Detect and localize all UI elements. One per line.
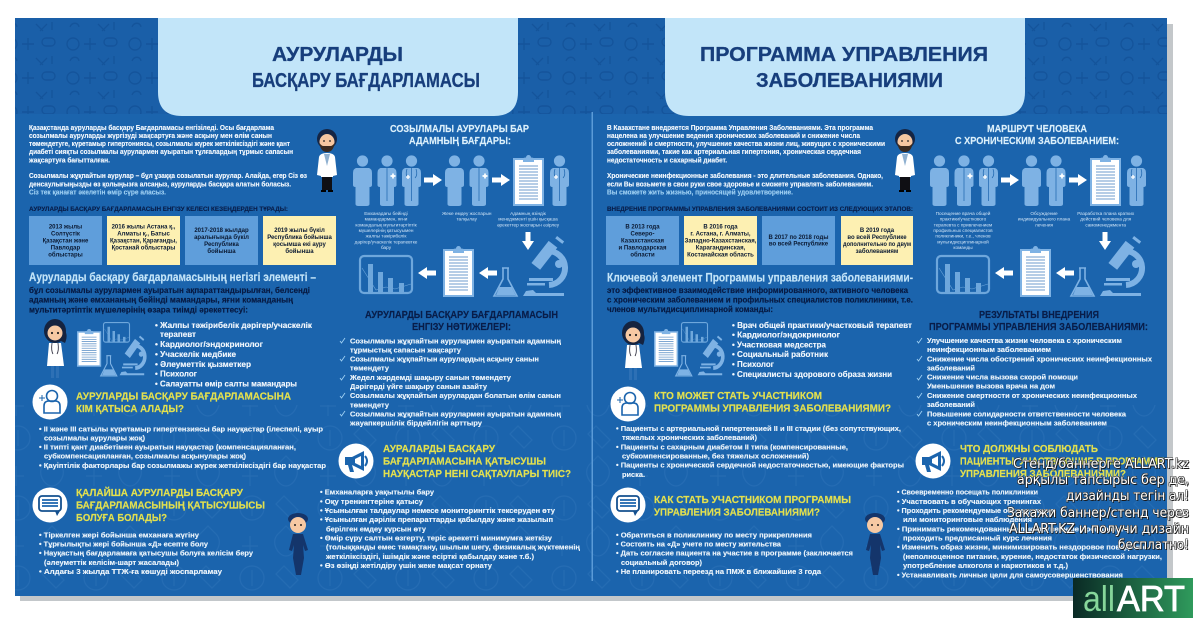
diagram: patient route: дәрігер/учаскелік терапевтке — [355, 239, 418, 244]
icon: chat — [32, 488, 68, 522]
list: team members: • Специалисты здорового образа жизни — [732, 370, 892, 379]
list: results: Созылмалы жұқпайтын аурулармен ауыратын адамның — [350, 337, 562, 345]
list: who can participate: • II типті қант диабетімен ауыратын науқастар (компенсацияланған, — [39, 444, 296, 452]
diagram: patient route: индивидуального плана — [1018, 217, 1071, 222]
diagram: patient route: мультидисциплинарной — [937, 238, 989, 244]
list: results: с хроническим неинфекционным заболеванием — [927, 419, 1107, 427]
heading: what patients must observe: УПРАВЛЕНИЯ ЗАБОЛЕВАНИЯМИ? — [960, 469, 1126, 480]
heading: results: ПРОГРАММЫ УПРАВЛЕНИЯ ЗАБОЛЕВАНИЯМИ: — [929, 322, 1148, 333]
heading: key element: Ключевой элемент Программы управления заболеваниями- — [607, 272, 913, 284]
stage boxes: Северо- — [631, 232, 654, 238]
list: results: Созылмалы жұқпайтын аурулардан болатын өлім санын — [350, 392, 561, 400]
diagram: patient route — [930, 155, 1146, 296]
text block: intro: заболеваниями, такие как артериальная гипертония, хроническая сердечная — [607, 148, 861, 156]
stage boxes: Казахстанская — [621, 238, 664, 244]
diagram: patient route: әрекеттер жоспарын әзірлеу — [497, 222, 560, 227]
list: what patients must observe: • Өз өзіңді жетілдіру үшін жеке мақсат орнату — [320, 562, 492, 570]
logo: allART — [1073, 578, 1193, 618]
text block: key element description: адамның және емхананың бейінді мамандары, яғни команданың — [29, 296, 293, 305]
list: how to become participant: (әлеуметтік келісім-шарт жасалады) — [44, 559, 180, 567]
heading: what patients must observe: АУРАЛАРДЫ БАСҚАРУ — [383, 444, 496, 455]
stage boxes: области — [630, 252, 655, 258]
heading: who can participate: ПРОГРАММЫ УПРАВЛЕНИЯ ЗАБОЛЕВАНИЯМИ? — [654, 404, 891, 414]
text block: key element description: бұл созылмалы аурулармен ауыратын ақпараттандырылған, белсенді — [29, 286, 310, 295]
icon: megaphone — [338, 444, 374, 478]
watermark text — [1007, 457, 1189, 553]
header tab: Kazakh title — [158, 18, 518, 116]
list: what patients must observe: • Своевременно посещать поликлиники — [897, 489, 1038, 497]
text block: intro: диабеті сияқты созылмалы аурулармен ауыратын тұлғалардың тұрмыс сапасын — [29, 148, 293, 156]
heading: stages: ВНЕДРЕНИЕ ПРОГРАММЫ УПРАВЛЕНИЯ ЗАБОЛЕВАНИЯМИ СОСТОИТ ИЗ СЛЕДУЮЩИХ ЭТАПОВ: — [607, 206, 913, 213]
logo: allART: ART — [1117, 578, 1185, 618]
list: who can participate — [39, 425, 327, 470]
list: results: заболеваний — [927, 401, 975, 409]
heading: key element: Ауруларды басқару бағдарламасының негізгі элементі – — [29, 271, 316, 284]
stage boxes: Костанайская область — [687, 252, 754, 258]
stage boxes: аралығында бүкіл — [194, 234, 249, 241]
list: how to become participant: • Науқастың бағдарламаға қатысушы болуға келісім беру — [39, 550, 253, 558]
header tab: Kazakh title: БАСҚАРУ БАҒДАРЛАМАСЫ — [252, 69, 480, 92]
text block: key element description — [607, 286, 913, 314]
stage boxes: 2019 жылы бүкіл — [274, 227, 325, 234]
diagram: patient route: Обсуждение — [1030, 211, 1058, 216]
list: results: Уменьшение вызова врача на дом — [927, 383, 1055, 391]
diagram: patient route: Посещение врача общей — [936, 210, 991, 216]
list: results: Повышение солидарности ответственности человека — [927, 410, 1126, 418]
heading: how to become participant: ҚАЛАЙША АУРУЛАРДЫ БАСҚАРУ — [76, 486, 244, 499]
diagram: patient route: талқылау — [456, 217, 478, 222]
list: team members: терапевт — [160, 330, 196, 339]
list: results: тұрмыстық сапасын жақсарту — [350, 346, 461, 354]
list: what patients must observe: • Өмір сүру салтын өзгерту, теріс әрекетті минимумға жеткізу — [320, 535, 552, 543]
stage boxes: бойынша — [207, 248, 236, 255]
stage boxes: 2016 жылы Астана қ., — [112, 224, 176, 230]
heading: how to become participant — [76, 486, 265, 524]
list: how to become participant: социальный договор) — [621, 559, 703, 567]
stage boxes: заболеваниям — [856, 248, 899, 255]
diagram: patient route: самоменеджмента — [1085, 222, 1126, 227]
icon: person plus — [32, 384, 68, 420]
list: results: Снижение смертности от хронических неинфекционных — [927, 392, 1137, 400]
list: what patients must observe — [320, 489, 581, 570]
diagram: patient route: мүшелерінің қатысуымен — [359, 228, 414, 233]
list: how to become participant — [616, 531, 853, 576]
list: how to become participant: • Алдағы 3 жылда ТТЖ-ға көшуді жоспарламау — [39, 568, 222, 576]
icon: male doctor — [317, 129, 337, 192]
diagram: patient route: терапевта с привлечением — [934, 222, 992, 227]
icon: person plus — [610, 386, 646, 422]
icon: chat — [610, 488, 646, 522]
list: who can participate — [616, 425, 904, 479]
heading: who can participate — [76, 392, 292, 415]
list: what patients must observe — [897, 489, 1162, 579]
stage boxes: бойынша — [285, 248, 314, 255]
stage boxes: 2017-2018 жылдар — [194, 228, 249, 234]
stage boxes: Западно-Казахстанская, — [685, 238, 757, 244]
list: how to become participant: • Тұрғылықты жері бойынша «Д» есепте болу — [39, 541, 208, 549]
diagram: patient route: бару — [381, 245, 392, 250]
list: results: Дәрігерді үйге шақыру санын азайту — [350, 383, 487, 391]
heading: who can participate: КІМ ҚАТЫСА АЛАДЫ? — [76, 404, 184, 415]
text block: key element description: членов мультидисциплинарной команды: — [607, 305, 773, 314]
list: what patients must observe: • Ұсынылған дәрілік препараттарды қабылдау және жазылып — [320, 516, 553, 524]
heading: results — [365, 310, 558, 333]
stage boxes: Қазақстан және — [43, 238, 89, 244]
list: team members: • Психолог — [732, 360, 775, 369]
diagram: patient route: команды — [953, 245, 973, 250]
text block: key element description — [29, 286, 310, 314]
diagram: patient route: Разработка плана кратких — [1077, 211, 1135, 216]
list: team members: • Психолог — [155, 370, 198, 378]
list: team members: • Кардиолог/эндокринолог — [155, 340, 264, 349]
text block: key element description: мультитәртіптік мүшелерінің өзара тиімді әрекеттесуі: — [29, 305, 248, 314]
list: results: заболеваний — [927, 364, 975, 372]
heading: who can participate: АУРУЛАРДЫ БАСҚАРУ БАҒДАРЛАМАСЫНА — [76, 392, 292, 402]
heading: who can participate — [654, 391, 891, 414]
watermark text: бесплатно! — [1118, 538, 1189, 553]
list: team members: • Участковая медсестра — [732, 340, 827, 350]
list: results: жауапкершілік бірдейлігін арттыру — [349, 420, 482, 428]
list: who can participate: субкомпенсированные, без тяжелых осложнений) — [622, 452, 810, 460]
text block: intro: Сіз тек қанағат әкелетін өмір сүре аласыз. — [29, 188, 166, 196]
list: what patients must observe: или мониторинговые наблюдения — [903, 516, 1032, 524]
diagram: patient route: Адамның өзіндік — [510, 211, 547, 216]
list: what patients must observe: • Проходить рекомендуемые обследования — [897, 507, 1055, 515]
list: what patients must observe: • Ұсынылған талдаулар немесе мониторингтік тексеруден өту — [320, 507, 555, 515]
list: how to become participant: • Дать согласие пациента на участие в программе (заключается — [616, 550, 853, 558]
text block: intro: Хронические неинфекционные заболевания - это длительные заболевания. Однако, — [607, 172, 883, 180]
stage boxes: г. Астана, г. Алматы, — [690, 232, 751, 238]
text block: intro: недостаточность и сахарный диабет. — [607, 156, 727, 164]
list: who can participate: • Пациенты с хронической сердечной недостаточностью, имеющие факторы — [616, 462, 904, 470]
list: what patients must observe: берілген емдеу курсын өту — [326, 525, 426, 533]
watermark text: арқылы тапсырыс бер де, — [1017, 473, 1189, 488]
list: team members: • Жалпы тәжірибелік дәрігер/учаскелік — [155, 321, 312, 330]
text block: intro: если Вы возьмете в свои руки свое здоровье и сможете управлять заболеванием. — [607, 180, 873, 188]
stage boxes: Республика бойынша — [267, 234, 332, 241]
list: who can participate: созылмалы аурулары жоқ) — [44, 434, 146, 442]
heading: patient route — [955, 124, 1119, 147]
heading: patient route: С ХРОНИЧЕСКИМ ЗАБОЛЕВАНИЕМ: — [955, 136, 1119, 147]
diagram: patient route: Жеке емдеу жоспарын — [442, 211, 492, 216]
list: who can participate: тяжелых хронических заболеваний) — [622, 434, 758, 442]
heading: results — [929, 310, 1148, 333]
text block: intro — [607, 124, 885, 196]
list: results: неинфекционным заболеванием — [927, 346, 1051, 354]
heading: what patients must observe: ПАЦИЕНТЫ, УЧАСТВУЮЩИЕ В ПРОГРАММЕ — [960, 456, 1164, 468]
diagram: patient route: поликлиники, т.е., членов — [935, 234, 991, 239]
list: results: Снижение числа обострений хронических неинфекционных — [927, 355, 1152, 363]
panel: Russian half — [606, 18, 1164, 579]
diagram: patient route: действий человека для — [1080, 216, 1132, 222]
text block: intro: созылмалы ауруларды жүргізуді жақсартуға және асқыну мен өлім санын — [29, 132, 272, 140]
stage boxes: Республика — [204, 241, 240, 248]
list: results: Созылмалы жұқпайтын аурулардың асқыну санын — [350, 355, 539, 363]
list: what patients must observe: • Устанавливать личные цели для самоусовершенствования — [897, 571, 1123, 579]
heading: what patients must observe: ЧТО ДОЛЖНЫ СОБЛЮДАТЬ — [960, 444, 1099, 455]
text block: intro: жақсартуға бағытталған. — [28, 156, 110, 164]
text block: intro: Созылмалы жұқпайтын аурулар – бұл ұзаққа созылатын аурулар. Алайда, егер Сіз өз — [29, 172, 308, 180]
icon: nurse — [288, 513, 308, 575]
list: team members: • Врач общей практики/участковый терапевт — [732, 321, 912, 330]
list: team members — [732, 321, 912, 379]
list: what patients must observe: проходить предписанный курс лечения — [903, 535, 1052, 543]
list: what patients must observe: (неполноценное питание, курение, недостаток физической нагрузки, — [903, 553, 1162, 561]
heading: how to become participant: БАҒДАРЛАМАСЫНЫҢ ҚАТЫСУШЫСЫ — [76, 500, 265, 512]
list: results: Снижение числа вызова скорой помощи — [927, 374, 1078, 382]
list: team members: • Салауатты өмір салты мамандары — [155, 380, 297, 388]
list: who can participate: • Пациенты с артериальной гипертензией II и III стадии (без сопутствующих, — [616, 425, 901, 433]
list: what patients must observe: • Участвовать в обучающих тренингах — [897, 498, 1041, 506]
stage boxes: во всей Республике — [847, 234, 907, 241]
heading: what patients must observe: БАҒДАРЛАМАСЫНА ҚАТЫСУШЫ — [383, 456, 546, 468]
heading: how to become participant — [654, 495, 851, 518]
header tab: Kazakh title: АУРУЛАРДЫ — [272, 43, 403, 66]
list: how to become participant: • Не планировать переезд на ПМЖ в ближайшие 3 года — [616, 568, 821, 576]
list: team members: • Социальный работник — [732, 350, 828, 359]
watermark text: Стенд/баннерге ALLART.kz — [1013, 457, 1189, 472]
diagram: patient route: командалық мультитәртіптік — [355, 222, 418, 227]
list: what patients must observe: • Принимать рекомендованные лекарственные препараты и — [897, 525, 1130, 533]
list: what patients must observe: • Изменить образ жизни, минимизировать нездоровое поведение — [897, 544, 1147, 552]
heading: patient route: СОЗЫЛМАЛЫ АУРУЛАРЫ БАР — [390, 124, 529, 135]
list: how to become participant: • Обратиться в поликлинику по месту прикрепления — [616, 531, 812, 539]
stage boxes: Қазақстан, Қарағанды, — [110, 238, 177, 244]
list: results: Улучшение качества жизни человека с хроническим — [927, 337, 1122, 345]
list: results: Жедел жәрдемді шақыру санын төмендету — [349, 374, 511, 382]
list: who can participate: • II және III сатылы күретамыр гипертензиясы бар науқастар (ілеспелі, ауыр — [39, 425, 324, 433]
heading: results: ЕНГІЗУ НӘТИЖЕЛЕРІ: — [412, 322, 511, 333]
text block: key element description: это эффективное взаимодействие информированного, активного человека — [607, 286, 909, 295]
icon: woman doctor with medical icons — [622, 321, 723, 380]
watermark text: ALLART.KZ и получи дизайн — [1009, 522, 1189, 537]
list: how to become participant — [39, 531, 253, 576]
list: results: төмендету — [350, 365, 389, 373]
stage boxes: В 2017 по 2018 годы — [769, 235, 828, 241]
list: team members: • Әлеуметтік қызметкер — [155, 360, 251, 369]
diagram: patient route: жалпы тәжірибелік — [366, 234, 407, 239]
list: team members: • Учаскелік медбике — [155, 350, 237, 359]
list: what patients must observe: жеткіліксіздігі, ішімдік және есірткі қабылдау және т.б.) — [325, 553, 535, 561]
stage boxes: В 2019 года — [860, 228, 895, 234]
header tab: Russian title: ПРОГРАММА УПРАВЛЕНИЯ — [700, 43, 988, 66]
stage boxes: и Павлодарская — [619, 246, 667, 252]
list: how to become participant: • Тіркелген жері бойынша емханаға жүгіну — [39, 531, 199, 539]
text block: key element description: с хроническим заболеванием и профильных специалистов поликлиники, т.е. — [607, 295, 913, 304]
list: what patients must observe: • Емханаларға уақытылы бару — [320, 489, 434, 497]
text block: intro: төмендетуге, күретамыр гипертониясы, созылмалы жүрек жеткіліксіздігі және қант — [29, 140, 291, 148]
list: who can participate: • Қауіптілік факторлары бар созылмажы жүрек жеткіліксіздігі бар науқастар — [39, 462, 327, 470]
heading: patient route: МАРШРУТ ЧЕЛОВЕКА — [987, 124, 1087, 135]
diagram: patient route: профильных специалистов — [933, 228, 993, 233]
icon: woman doctor with medical icons — [44, 319, 145, 378]
list: results — [917, 337, 1152, 427]
stage boxes: во всей Республике — [769, 240, 829, 248]
heading: what patients must observe — [960, 444, 1164, 480]
text block: intro: В Казахстане внедряется Программа Управления Заболеваниями. Эта программа — [607, 124, 873, 132]
header tab: Russian title — [665, 18, 1025, 116]
heading: results: РЕЗУЛЬТАТЫ ВНЕДРЕНИЯ — [979, 310, 1099, 321]
text block: intro: Вы сможете жить жизнью, приносящей удовлетворение. — [607, 188, 793, 196]
list: who can participate: риска. — [622, 471, 645, 479]
stage boxes: Алматы қ., Батыс — [117, 232, 170, 238]
list: who can participate: • Пациенты с сахарным диабетом II типа (компенсированные, — [616, 443, 848, 451]
text block: intro: денсаулығыңызды өз қолыңызға алсаңыз, ауруларды басқара алатын боласыз. — [29, 180, 291, 188]
list: what patients must observe: (толыққанды емес тамақтану, шылым шегу, физикалық жүктеменің — [326, 544, 581, 552]
stage boxes — [29, 216, 336, 265]
diagram: patient route: практики/участкового — [940, 217, 987, 222]
icon: male doctor — [895, 129, 915, 192]
list: results: төмендету — [350, 401, 389, 409]
stage boxes: Солтүстік — [51, 232, 80, 238]
stage boxes: 2013 жылы — [49, 224, 82, 230]
list: results: Созылмалы жұқпайтын аурулармен ауыратын адамның — [350, 410, 562, 418]
stage boxes: Қостанай облыстары — [112, 244, 175, 252]
heading: stages: АУРУЛАРДЫ БАСҚАРУ БАҒДАРЛАМАСЫН ЕНГІЗУ КЕЛЕСІ КЕЗЕҢДЕРДЕН ТҰРАДЫ: — [29, 206, 288, 213]
diagram: patient route: лечения — [1035, 222, 1053, 227]
heading: patient route: АДАМНЫҢ БАҒДАРЫ: — [409, 136, 511, 147]
icon: megaphone — [916, 444, 950, 478]
list: results — [340, 337, 562, 428]
text block: intro: нацелена на улучшение ведения хронических заболеваний и снижение числа — [607, 132, 860, 140]
text block: intro — [28, 124, 308, 196]
heading: patient route — [390, 124, 529, 147]
icon: nurse — [865, 513, 885, 575]
text block: intro: Қазақстанда ауруларды басқару Бағдарламасы енгізіледі. Осы бағдарлама — [29, 124, 274, 132]
diagram: patient route — [353, 155, 569, 296]
heading: what patients must observe: НАУҚАСТАР НЕНІ САҚТАУЛАРЫ ТИІС? — [383, 469, 571, 480]
stage boxes: В 2016 года — [703, 224, 738, 230]
stage boxes: Карагандинская, — [696, 246, 746, 252]
stage boxes: дополнительно по двум — [843, 242, 912, 248]
stage boxes: В 2013 года — [625, 224, 660, 230]
list: how to become participant: • Состоять на «Д» учете по месту жительства — [616, 540, 781, 548]
heading: results: АУРУЛАРДЫ БАСҚАРУ БАҒДАРЛАМАСЫН — [365, 310, 558, 321]
stage boxes: Павлодар — [51, 246, 81, 252]
stage boxes — [606, 216, 913, 265]
list: who can participate: субкомпенсацияланған, созылмалы асқынулары жоқ) — [44, 453, 247, 461]
heading: how to become participant: КАК СТАТЬ УЧАСТНИКОМ ПРОГРАММЫ — [654, 495, 851, 506]
stage boxes: қосымша екі ауру — [273, 242, 327, 248]
diagram: patient route: менеджменті үшін қысқаша — [498, 217, 558, 222]
text block: intro: осложнений и смертности, улучшение качества жизни лиц, живущих с хроническими — [607, 140, 885, 148]
list: team members — [155, 321, 312, 388]
header tab: Russian title: ЗАБОЛЕВАНИЯМИ — [756, 69, 943, 92]
list: what patients must observe: • Оқу тренингтеріне қатысу — [320, 498, 423, 506]
list: what patients must observe: употребление алкоголя и наркотиков и т.д.) — [903, 562, 1069, 570]
heading: what patients must observe — [383, 444, 571, 480]
heading: who can participate: КТО МОЖЕТ СТАТЬ УЧАСТНИКОМ — [654, 391, 822, 402]
heading: how to become participant: УПРАВЛЕНИЯ ЗАБОЛЕВАНИЯМИ? — [654, 508, 820, 518]
panel: Kazakh half — [28, 18, 581, 576]
logo: allART: all — [1083, 578, 1115, 618]
stage boxes: облыстары — [48, 252, 83, 258]
diagram: patient route: мамандармен, яғни — [365, 217, 408, 222]
list: team members: • Кардиолог/эндокринолог — [732, 330, 841, 340]
heading: how to become participant: БОЛУҒА БОЛАДЫ? — [76, 513, 167, 524]
diagram: patient route: Емханадағы бейінді — [364, 210, 408, 216]
